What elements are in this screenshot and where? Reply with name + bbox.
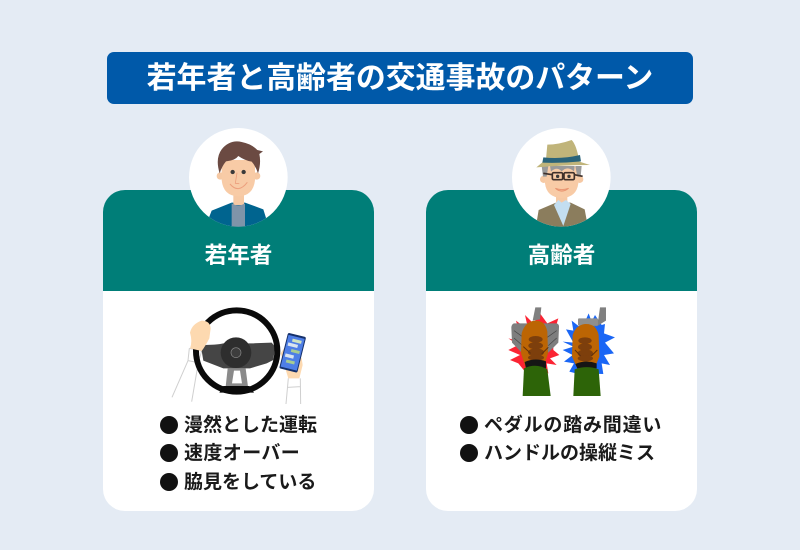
list: elderly driver patterns: ペダルの踏み間違い (484, 415, 662, 436)
panel: young drivers (103, 190, 374, 511)
panel header: elderly drivers (426, 190, 697, 291)
icon: steering wheel with hand and smartphone (172, 310, 306, 404)
list: elderly driver patterns: ハンドルの操縦ミス (484, 443, 655, 464)
panel header: young drivers (103, 190, 374, 291)
icon: elderly man with hat portrait (512, 128, 611, 230)
heading: young drivers: 若年者 (205, 243, 272, 268)
list: young driver patterns: 漫然とした運転 (184, 415, 317, 436)
title (107, 52, 693, 104)
list: young driver patterns (160, 414, 317, 493)
panel: elderly drivers (426, 190, 697, 511)
list: young driver patterns: 脇見をしている (184, 472, 316, 493)
title: 若年者と高齢者の交通事故のパターン (147, 62, 653, 95)
heading: elderly drivers: 高齢者 (528, 243, 595, 268)
list: elderly driver patterns (460, 414, 662, 464)
smartphone (279, 333, 306, 373)
icon: feet on pedals (508, 307, 615, 396)
list: young driver patterns: 速度オーバー (184, 443, 300, 464)
icon: young man portrait (189, 128, 288, 230)
left hand on wheel (190, 321, 211, 351)
